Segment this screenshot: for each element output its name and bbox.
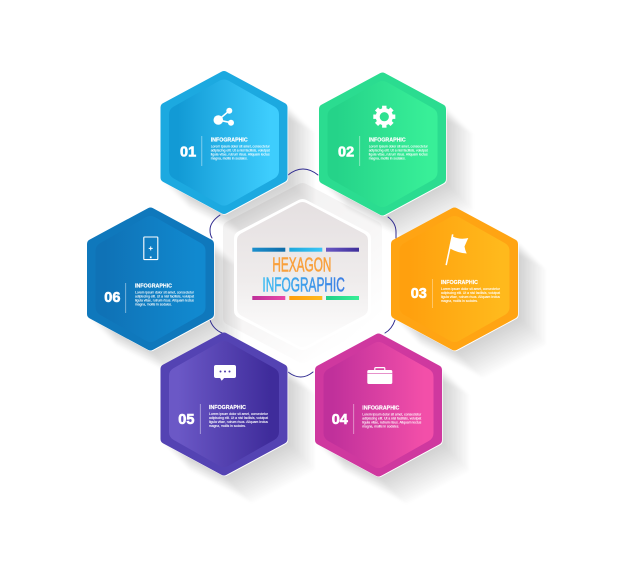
text block 02: [369, 138, 429, 161]
panel: 06: [92, 212, 210, 346]
text block 05: [209, 405, 269, 428]
number 03: 03: [411, 286, 427, 302]
text block 04: ligula vitae, rutrum risus. Aliquam lectus: [362, 420, 422, 424]
text block 01: INFOGRAPHIC: [211, 138, 248, 144]
heading: hexagon infographic: INFOGRAPHIC: [262, 274, 345, 297]
text block 03: adipiscing elit. Ut a nisl facilisis, volutpat: [441, 291, 500, 295]
icon: share: [214, 108, 234, 126]
text block 01: ligula vitae, rutrum risus. Aliquam lectus: [211, 153, 270, 157]
text block 03: Lorem ipsum dolor sit amet, consectetur: [441, 287, 501, 291]
panel: 04: [320, 338, 438, 472]
text block 01: [211, 138, 271, 161]
long shadows behind hexagons: [90, 74, 546, 504]
text block 04: adipiscing elit. Ut a nisl facilisis, volutpat: [362, 416, 421, 420]
text block 05: ligula vitae, rutrum risus. Aliquam lectus: [209, 420, 268, 424]
text block 06: [135, 284, 195, 307]
panel: 02: [324, 78, 442, 211]
text block 02: Lorem ipsum dolor sit amet, consectetur: [369, 145, 429, 149]
text block 03: magna, mollis in sodales.: [441, 299, 478, 303]
text block 03: INFOGRAPHIC: [441, 280, 478, 286]
text block 01: adipiscing elit. Ut a nisl facilisis, volutpat: [211, 149, 270, 153]
panel: 01: [166, 76, 283, 210]
icon: flag: [445, 234, 468, 265]
text block 02: ligula vitae, rutrum risus. Aliquam lectus: [369, 153, 428, 157]
connector arcs around centre: [210, 169, 396, 377]
icon: gear: [373, 106, 395, 128]
panel: 03: [396, 212, 514, 346]
number 02: 02: [338, 144, 354, 160]
text block 03: ligula vitae, rutrum risus. Aliquam lectus: [441, 295, 500, 299]
top colour bars: [252, 248, 359, 252]
text block 04: [362, 405, 422, 428]
text block 02: adipiscing elit. Ut a nisl facilisis, volutpat: [369, 149, 428, 153]
heading: hexagon infographic: [262, 255, 345, 297]
text block 01: magna, mollis in sodales.: [211, 157, 248, 161]
text block 06: ligula vitae, rutrum risus. Aliquam lectus: [135, 299, 194, 303]
centre hexagon outer ring: [230, 190, 375, 356]
icon: phone: [144, 237, 158, 260]
text block 05: INFOGRAPHIC: [209, 405, 246, 411]
number 06: 06: [104, 290, 120, 306]
text block 04: magna, mollis in sodales.: [362, 424, 399, 428]
text block 06: magna, mollis in sodales.: [135, 303, 172, 307]
number 01: 01: [180, 144, 196, 160]
number 05: 05: [178, 412, 194, 428]
bottom colour bars: [252, 296, 359, 300]
text block 03: [441, 280, 501, 303]
heading: hexagon infographic: HEXAGON: [272, 255, 331, 277]
text block 04: Lorem ipsum dolor sit amet, consectetur: [362, 412, 422, 416]
text block 06: adipiscing elit. Ut a nisl facilisis, volutpat: [135, 295, 194, 299]
icon: chat bubble: [214, 365, 236, 381]
text block 02: magna, mollis in sodales.: [369, 157, 406, 161]
text block 06: INFOGRAPHIC: [135, 284, 172, 290]
panel: centre hexagon: [242, 207, 363, 342]
text block 02: INFOGRAPHIC: [369, 138, 406, 144]
text block 05: Lorem ipsum dolor sit amet, consectetur: [209, 412, 269, 416]
text block 05: adipiscing elit. Ut a nisl facilisis, volutpat: [209, 416, 268, 420]
text block 05: magna, mollis in sodales.: [209, 424, 246, 428]
text block 06: Lorem ipsum dolor sit amet, consectetur: [135, 291, 195, 295]
number 04: 04: [332, 412, 348, 428]
icon: briefcase: [367, 368, 392, 384]
text block 01: Lorem ipsum dolor sit amet, consectetur: [211, 145, 271, 149]
panel: 05: [166, 338, 283, 471]
text block 04: INFOGRAPHIC: [362, 405, 400, 411]
